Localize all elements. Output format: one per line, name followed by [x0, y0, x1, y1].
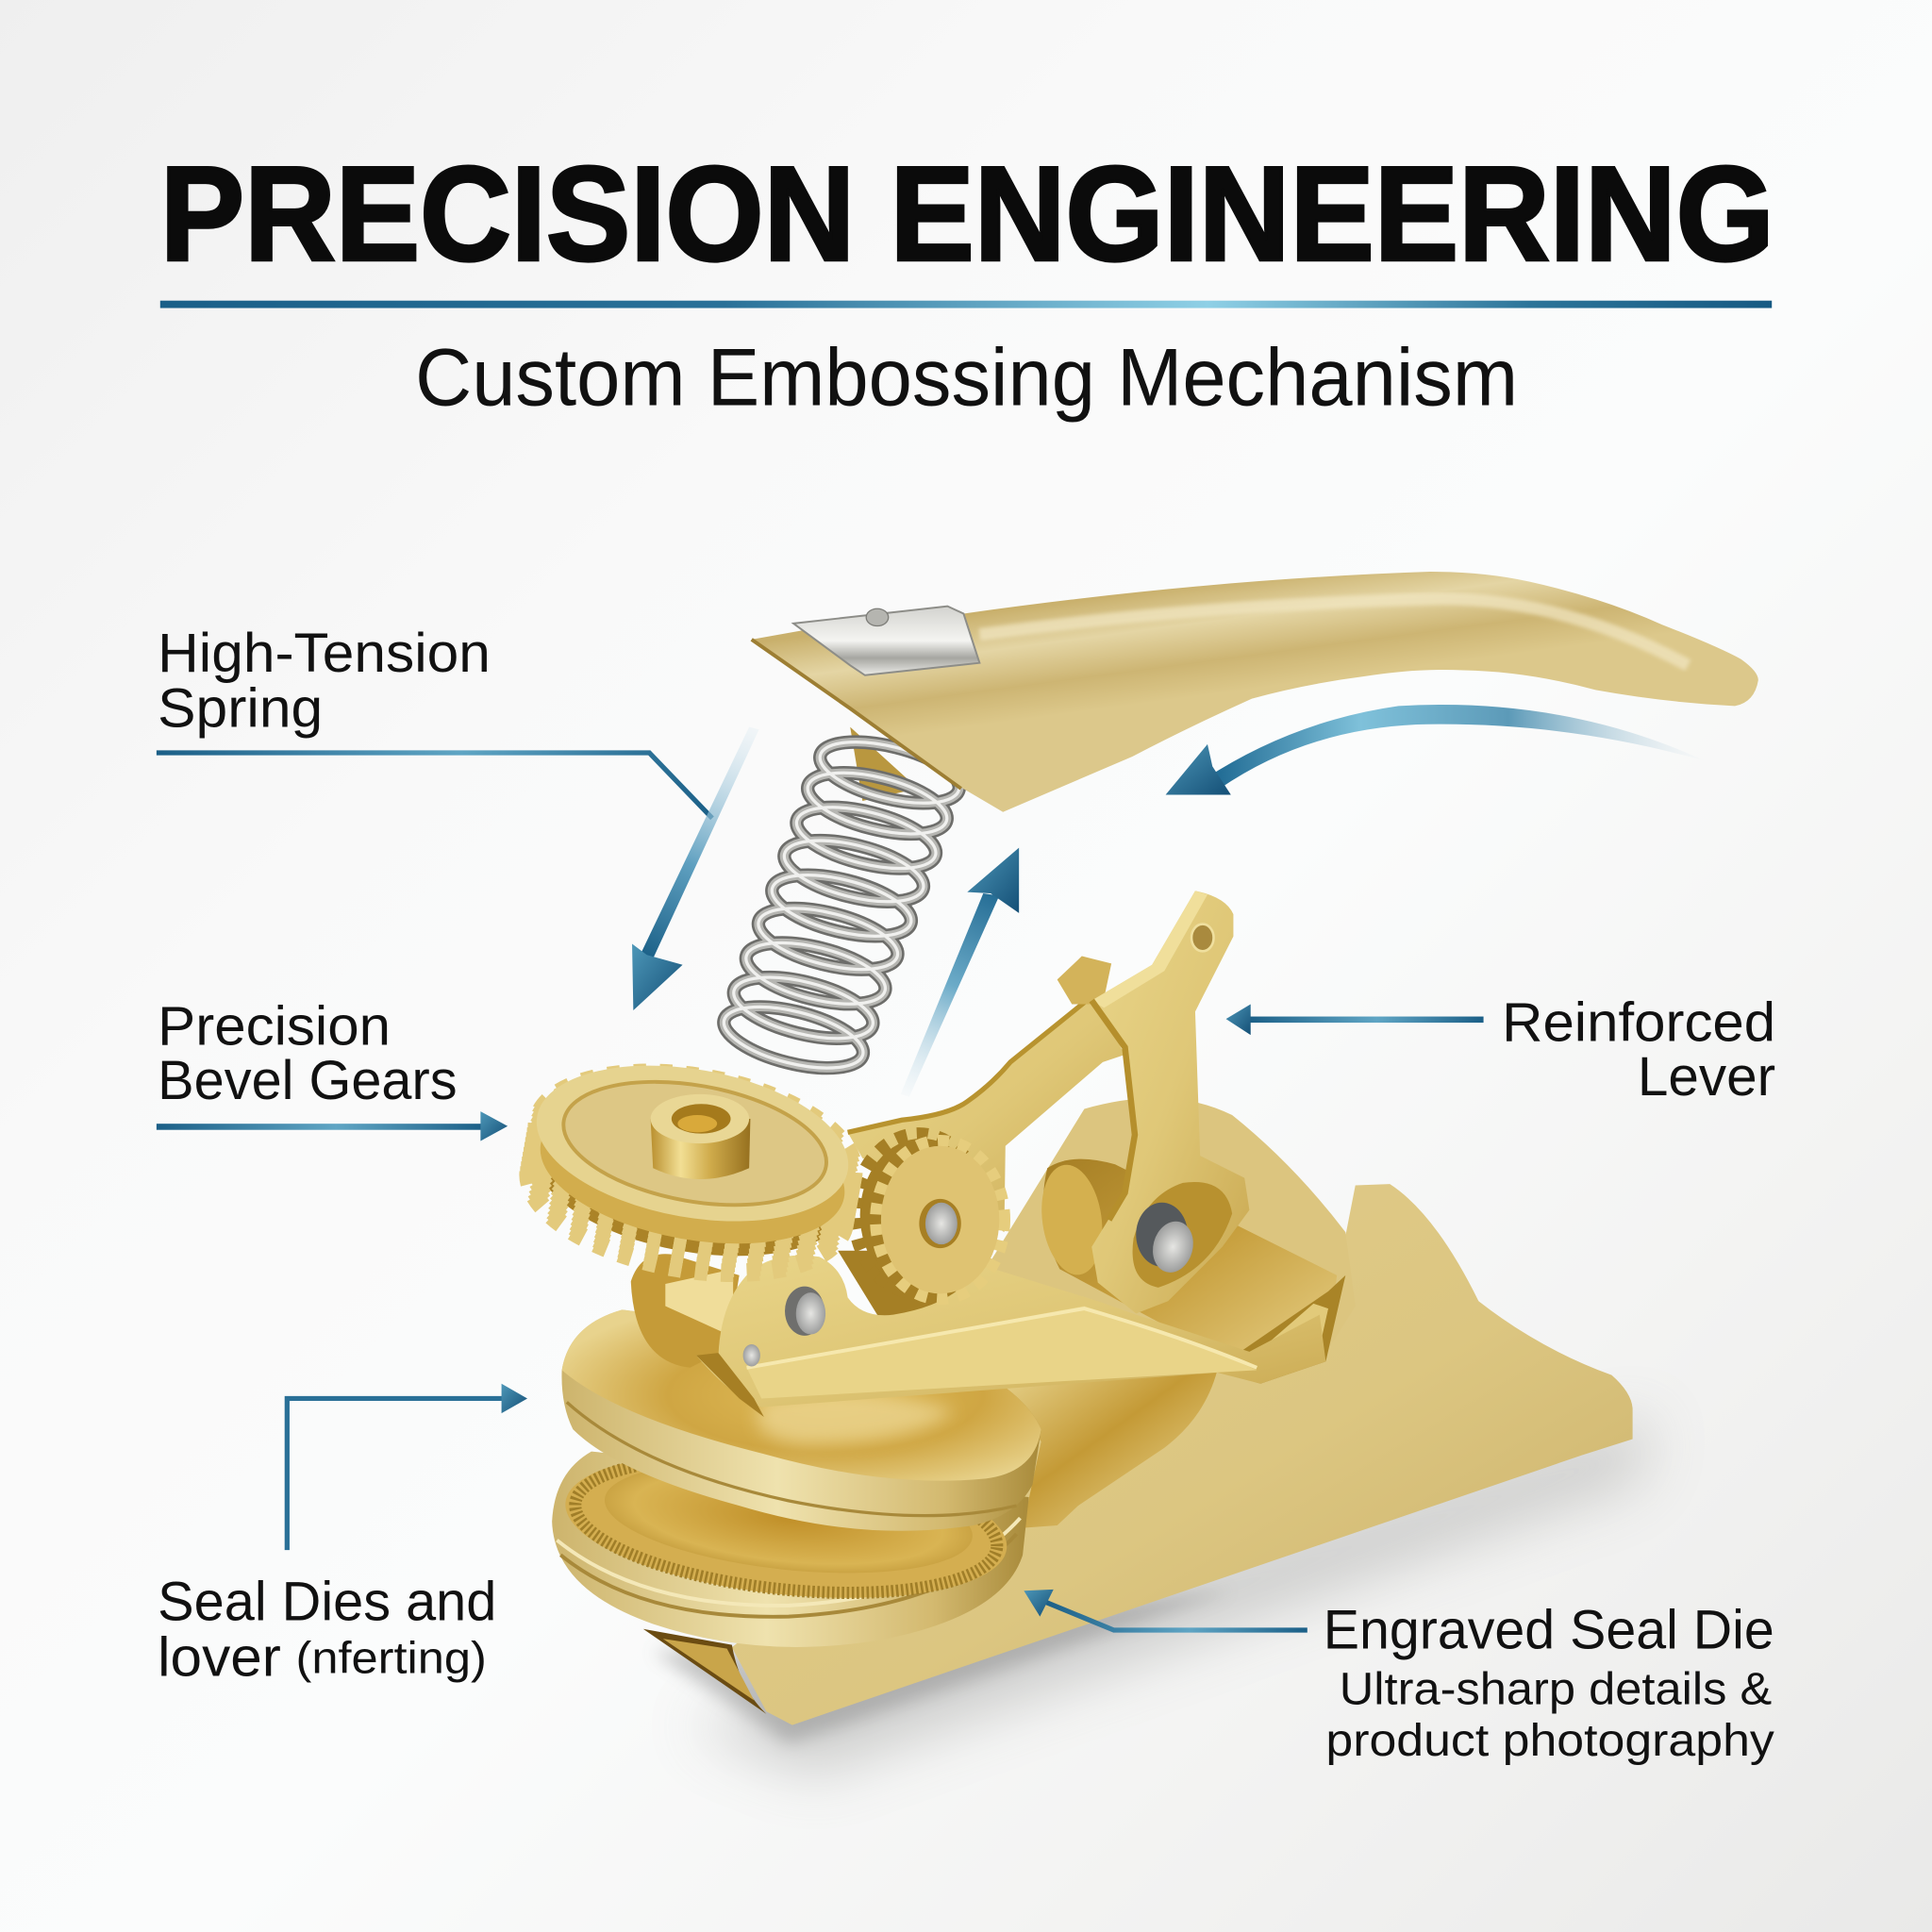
- label: high-tension spring: [158, 623, 491, 740]
- title: PRECISION ENGINEERING: [160, 140, 1774, 290]
- gear backing: [838, 1251, 986, 1321]
- metal clip: [793, 607, 979, 675]
- label: reinforced lever: Lever: [1638, 1046, 1775, 1108]
- lower lever pin: [785, 1287, 824, 1336]
- embossing mechanism: [517, 572, 1758, 1725]
- gear recess: [554, 1063, 836, 1224]
- label: high-tension spring: High-Tension: [158, 623, 491, 684]
- label: seal dies: lover: [158, 1626, 281, 1688]
- arrow: seal dies: [287, 1384, 527, 1550]
- rear cylinder: [1043, 1159, 1337, 1361]
- lever pivot pin: [1133, 1182, 1232, 1288]
- arrow: reinforced lever: [1226, 1004, 1484, 1035]
- lower die: [552, 1434, 1029, 1647]
- lever nut: [1058, 957, 1111, 1004]
- handle: [752, 572, 1758, 812]
- arrow: spring compress down: [632, 727, 759, 1010]
- title rule: [160, 301, 1772, 308]
- lever hole: [1191, 924, 1214, 951]
- label: high-tension spring: Spring: [158, 678, 323, 740]
- arrow: bevel gears: [157, 1111, 508, 1141]
- label: reinforced lever: Reinforced: [1502, 992, 1775, 1054]
- base wedge: [732, 1184, 1633, 1725]
- label: precision bevel gears: Precision: [158, 996, 391, 1058]
- base opening: [643, 1629, 766, 1714]
- floor shadow: [653, 1417, 1651, 1774]
- spring: [718, 727, 965, 1080]
- lower lever plate: [696, 1256, 1325, 1407]
- label: engraved seal die: Engraved Seal Die: [1324, 1600, 1774, 1661]
- label: engraved seal die: product photography: [1325, 1715, 1775, 1766]
- knurled seal ring: [558, 1434, 1014, 1617]
- upper lever arm: [848, 1001, 1124, 1232]
- label: seal dies: (nferting): [295, 1633, 487, 1683]
- small gear: [855, 1135, 1004, 1299]
- side bracket: [1214, 1275, 1345, 1384]
- label: precision bevel gears: [158, 996, 458, 1111]
- label: engraved seal die: Ultra-sharp details &: [1340, 1663, 1772, 1714]
- shaft behind gear: [631, 1254, 740, 1368]
- arrow: engraved seal die: [1024, 1590, 1307, 1630]
- large bevel gear: [517, 1043, 865, 1295]
- label: engraved seal die: [1324, 1600, 1775, 1766]
- subtitle: Custom Embossing Mechanism: [415, 333, 1518, 424]
- die top surface: [562, 1309, 1041, 1481]
- label: reinforced lever: [1502, 992, 1775, 1108]
- front lever plate: [1091, 891, 1249, 1313]
- gear hub: [651, 1119, 750, 1179]
- die cutout in base: [998, 1370, 1217, 1528]
- label: seal dies: Seal Dies and: [158, 1572, 496, 1633]
- arrow: spring release up: [901, 848, 1019, 1096]
- upper die: [561, 1309, 1041, 1531]
- leader: high-tension spring: [157, 753, 712, 818]
- rear plate: [986, 1098, 1356, 1368]
- label: precision bevel gears: Bevel Gears: [158, 1050, 458, 1111]
- arrow: handle curved motion: [1166, 705, 1707, 794]
- label: seal dies: [158, 1572, 496, 1688]
